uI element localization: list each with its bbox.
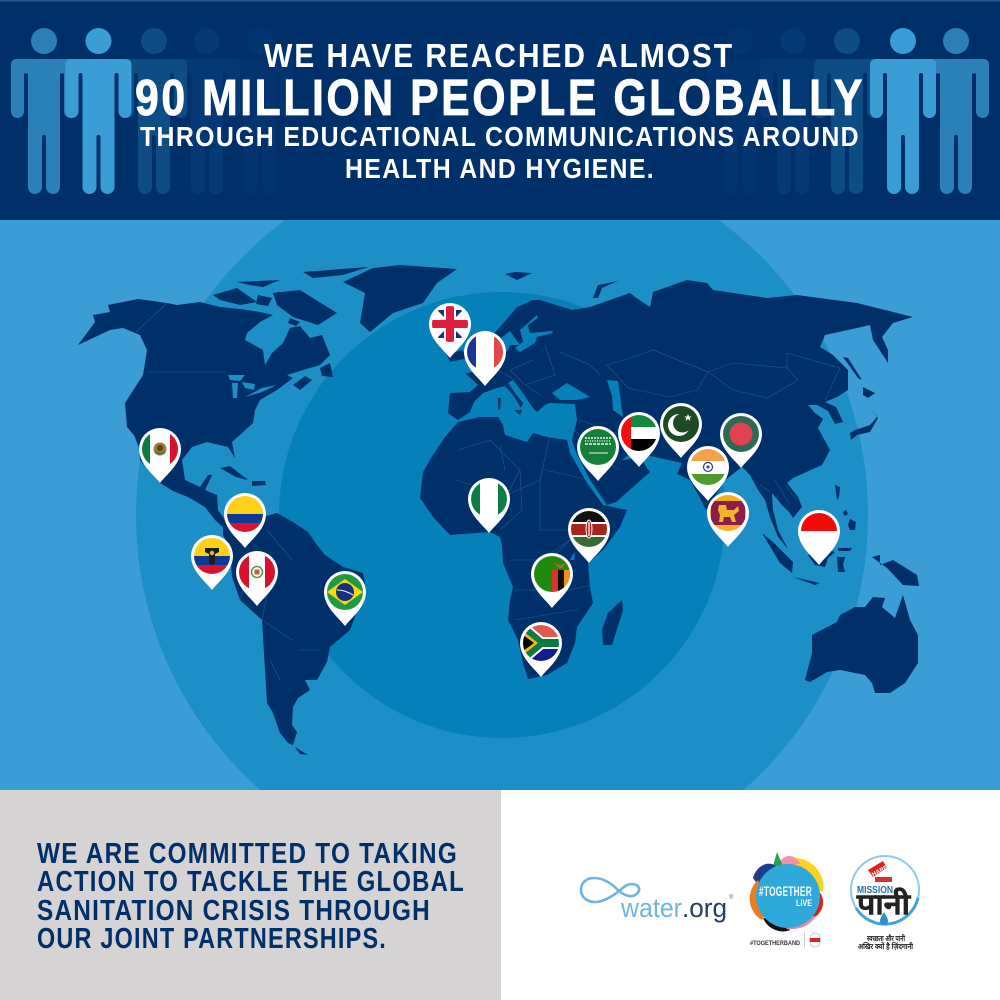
Sakhalin and Japan — [843, 357, 878, 440]
Newfoundland and Maritimes — [293, 363, 333, 390]
New Guinea — [872, 555, 919, 586]
Britain — [447, 350, 468, 362]
logo: Mission Paani: पानी — [856, 887, 912, 921]
world map — [78, 265, 919, 755]
pin: Saudi Arabia — [577, 426, 619, 481]
pin: United Arab Emirates — [618, 412, 660, 467]
pin: Pakistan — [660, 403, 702, 458]
pin: Mexico — [139, 428, 181, 483]
Arctic islands — [213, 267, 368, 326]
title: WE HAVE REACHED ALMOST — [264, 37, 734, 74]
logo: Mission Paani: HARPIC — [871, 862, 895, 878]
pin: Peru — [236, 551, 278, 606]
icon: row of people right — [707, 28, 989, 194]
pin: Sri Lanka — [707, 492, 749, 547]
pin: Bangladesh — [720, 413, 762, 468]
panel: partner logos — [501, 790, 1000, 1000]
pin: Ecuador — [191, 535, 233, 590]
title: 90 MILLION PEOPLE GLOBALLY — [135, 69, 865, 126]
North and Central America — [78, 299, 330, 530]
Australia — [805, 595, 918, 693]
Novaya Zemlya and Svalbard — [505, 272, 618, 298]
Tierra del Fuego — [295, 747, 308, 755]
logo: water.org: ® — [729, 894, 734, 901]
icon: row of people left — [11, 28, 293, 194]
title: HEALTH AND HYGIENE. — [345, 153, 655, 184]
pin: Nigeria — [468, 478, 510, 533]
commitment text: WE ARE COMMITTED TO TAKING — [37, 838, 458, 870]
commitment text: SANITATION CRISIS THROUGH — [37, 895, 431, 927]
commitment text: OUR JOINT PARTNERSHIPS. — [37, 923, 387, 955]
logo: water.org: water — [620, 893, 682, 923]
panel: commitment statement — [0, 790, 501, 1000]
Eurasia — [448, 280, 913, 549]
commitment text: ACTION TO TACKLE THE GLOBAL — [37, 866, 465, 898]
Greenland — [343, 265, 457, 332]
pin: Brazil — [324, 571, 366, 626]
panel: header banner — [0, 0, 1000, 220]
pin: Zambia — [531, 553, 573, 608]
logo: Mission Paani: MISSION — [857, 885, 893, 896]
pin: Indonesia — [798, 510, 840, 565]
logo: Together Live: #TOGETHER — [759, 884, 812, 899]
Cuba and Hispaniola — [220, 466, 266, 486]
Madagascar — [602, 600, 623, 645]
logo: Mission Paani: अखिर क्यों है ज़िंदगानी — [858, 942, 914, 951]
panel: world map background — [0, 220, 1000, 790]
logo: Together Live: #TOGETHERBAND — [750, 940, 800, 947]
Baja California — [133, 432, 155, 472]
title: THROUGH EDUCATIONAL COMMUNICATIONS AROUND — [140, 121, 860, 152]
logo: Together Live: LIVE — [796, 898, 812, 908]
South America — [223, 513, 365, 745]
logo: Mission Paani — [851, 856, 919, 951]
pin: India — [687, 446, 729, 501]
logo: Together Live — [750, 852, 823, 947]
logo: water.org: .org — [682, 893, 727, 923]
commitment text — [37, 838, 465, 955]
title — [135, 37, 865, 184]
pin: France — [464, 331, 506, 386]
Africa — [420, 417, 627, 679]
pin: Kenya — [568, 508, 610, 563]
logo: water.org — [581, 878, 734, 923]
pin: United Kingdom — [429, 303, 471, 358]
South-East Asia islands — [762, 485, 856, 585]
pin: South Africa — [520, 622, 562, 677]
pin: Colombia — [224, 493, 266, 548]
logo: Mission Paani: स्वच्छता और पानी — [866, 934, 906, 943]
Sicily, Sardinia, Corsica — [498, 398, 522, 415]
country borders — [136, 303, 840, 680]
inland seas — [228, 315, 623, 560]
